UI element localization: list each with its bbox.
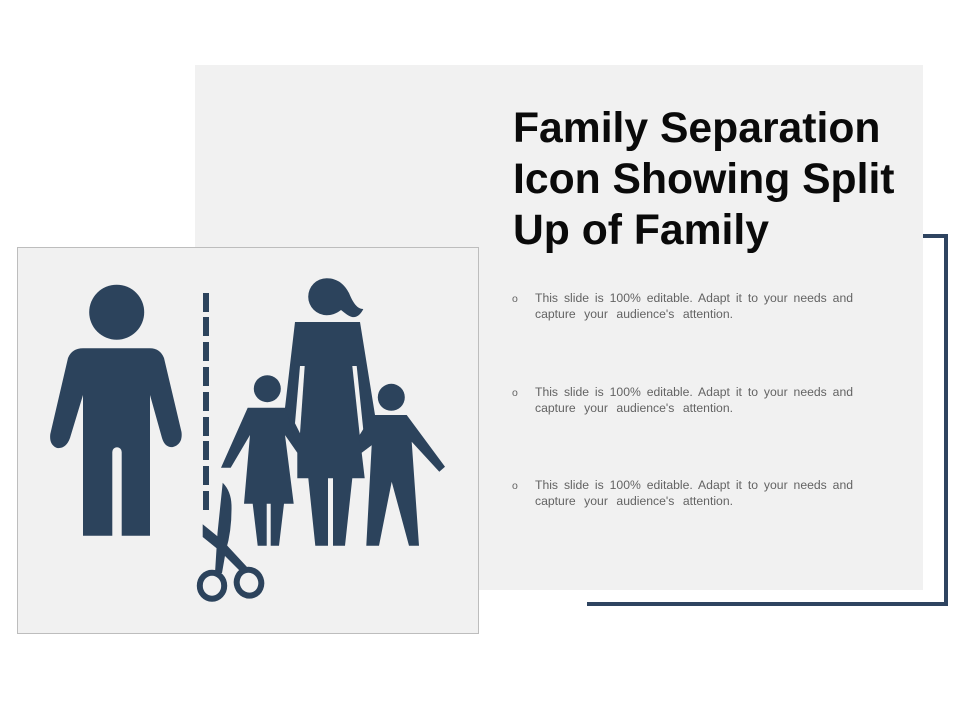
bullet text 2: o bbox=[512, 387, 518, 399]
bullet text 1: o bbox=[512, 293, 518, 305]
bullet text 1: This slide is 100% editable. Adapt it to your needs and bbox=[535, 291, 853, 305]
bullet text 2 bbox=[512, 385, 853, 415]
icon: man bbox=[50, 285, 182, 536]
bullet text 3: capture your audience's attention. bbox=[535, 494, 733, 508]
title bbox=[513, 104, 895, 254]
icon: scissors bbox=[200, 483, 265, 599]
dashed cut line bbox=[203, 293, 209, 510]
title: Up of Family bbox=[513, 206, 769, 254]
panel: icon box bbox=[17, 247, 479, 634]
icon: boy bbox=[359, 384, 445, 546]
title: Family Separation bbox=[513, 104, 880, 152]
bullet text 3: This slide is 100% editable. Adapt it to your needs and bbox=[535, 478, 853, 492]
title: Icon Showing Split bbox=[513, 155, 895, 203]
bullet text 1 bbox=[512, 291, 853, 321]
bullet text 2: This slide is 100% editable. Adapt it to your needs and bbox=[535, 385, 853, 399]
bullet text 2: capture your audience's attention. bbox=[535, 401, 733, 415]
panel: background grey panel bbox=[195, 65, 923, 590]
icon: mother bbox=[285, 278, 375, 546]
bullet text 1: capture your audience's attention. bbox=[535, 307, 733, 321]
icon: girl bbox=[221, 375, 297, 546]
bullet text 3 bbox=[512, 478, 853, 508]
bullet text 3: o bbox=[512, 480, 518, 492]
